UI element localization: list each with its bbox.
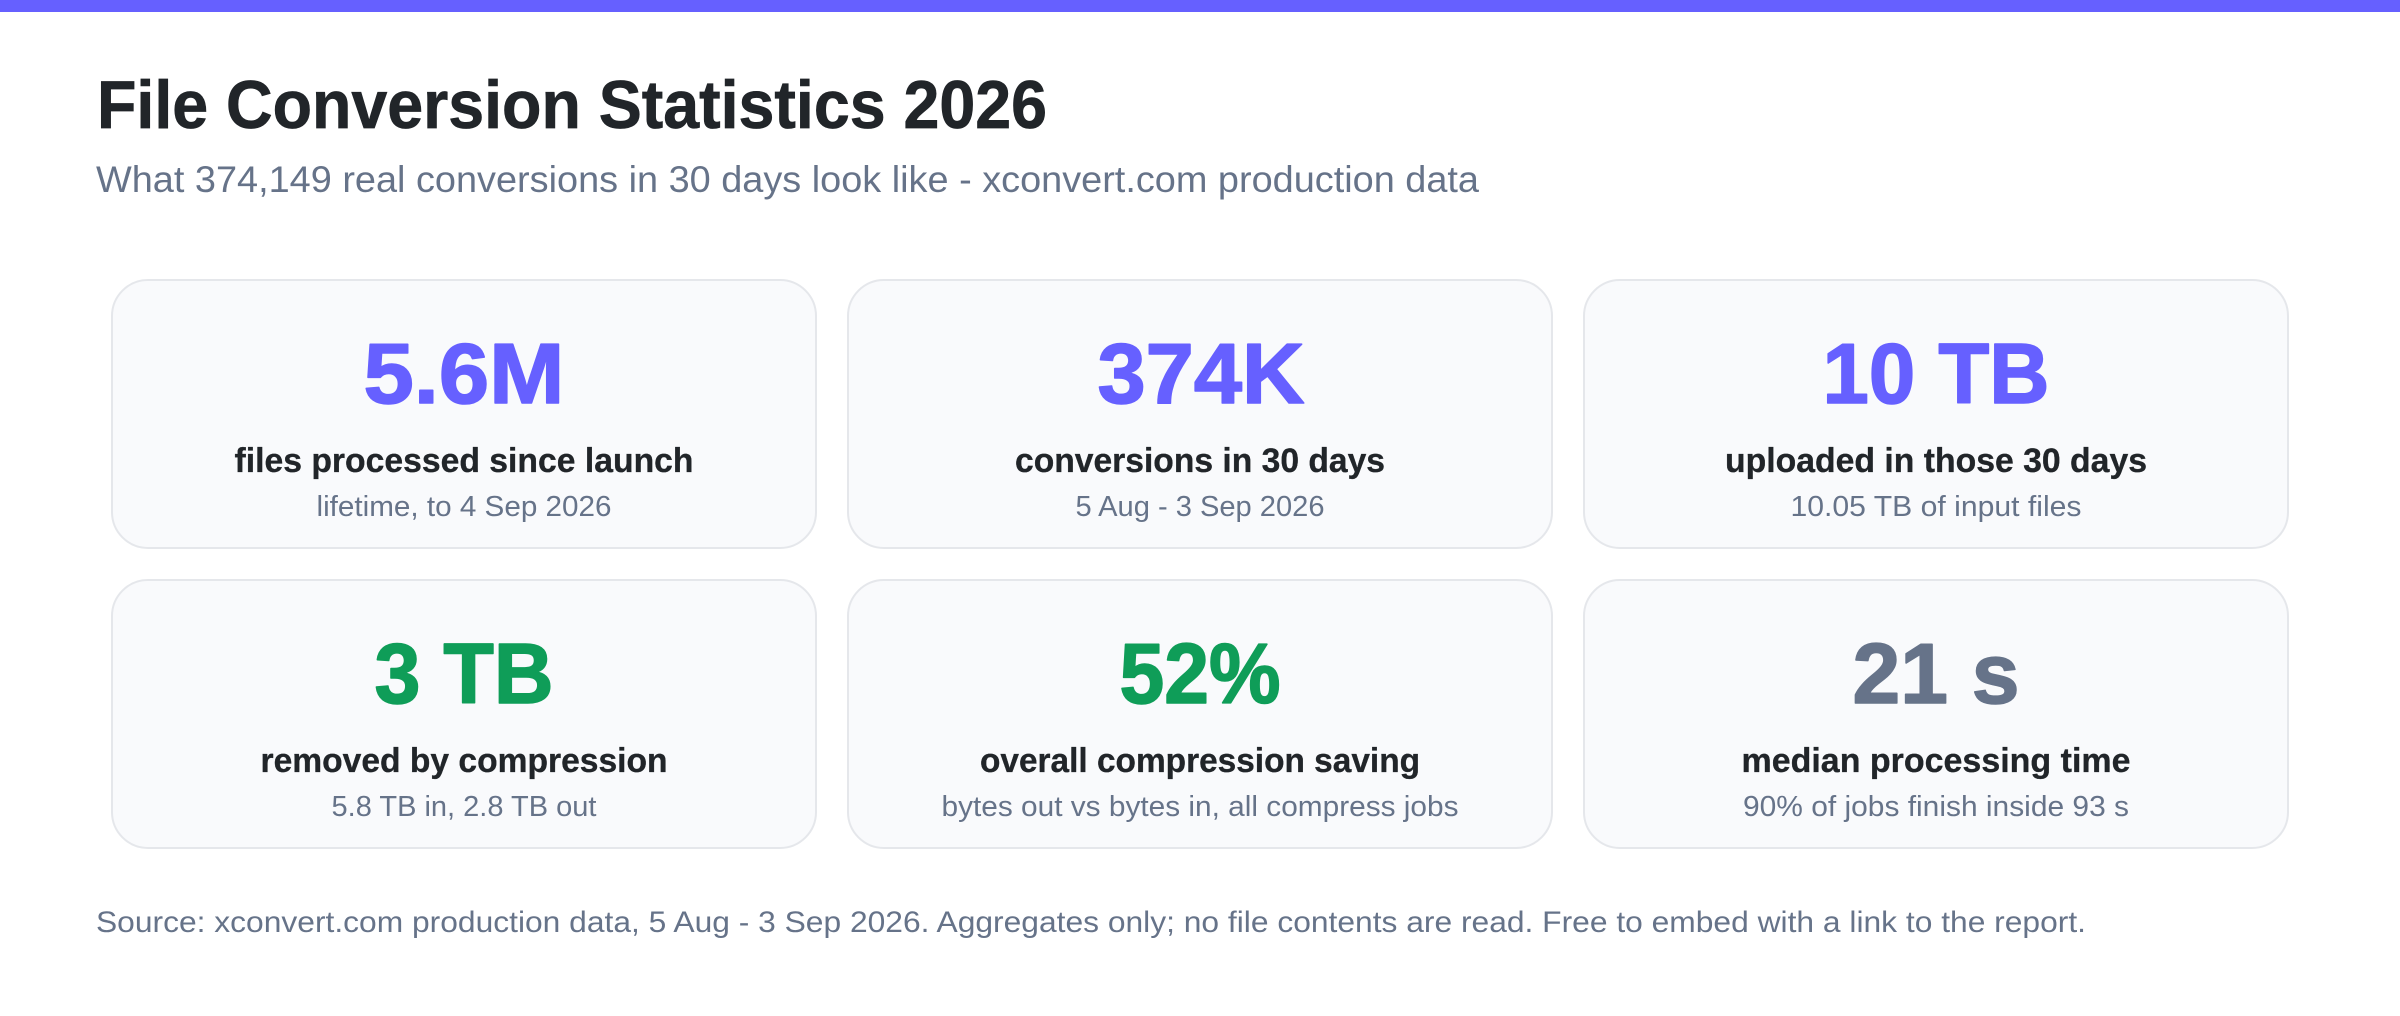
title: File Conversion Statistics 2026 bbox=[97, 67, 1047, 143]
top accent bar bbox=[0, 0, 2400, 12]
panel: processing time bbox=[1584, 580, 2288, 848]
note: input files: 10.05 TB of input files bbox=[1790, 491, 2082, 523]
label: median: median processing time bbox=[1742, 742, 2130, 780]
label: uploaded: uploaded in those 30 days bbox=[1725, 442, 2147, 480]
footer source note: Source: xconvert.com production data, 5 Aug - 3 Sep 2026. Aggregates only; no file contents are read. Free to embed with a link to the report. bbox=[96, 906, 2086, 939]
note: lifetime: lifetime, to 4 Sep 2026 bbox=[316, 491, 612, 523]
value: 52%: 52% bbox=[1120, 627, 1280, 722]
label: removed: removed by compression bbox=[260, 742, 668, 780]
value: 10 TB: 10 TB bbox=[1822, 327, 2050, 422]
value: 374K: 374K bbox=[1098, 327, 1304, 422]
note: bytes: bytes out vs bytes in, all compress jobs bbox=[942, 791, 1458, 823]
panel: compression saving bbox=[848, 580, 1552, 848]
note: 90%: 90% of jobs finish inside 93 s bbox=[1743, 791, 2129, 823]
label: saving: overall compression saving bbox=[980, 742, 1420, 780]
note: date range: 5 Aug - 3 Sep 2026 bbox=[1076, 491, 1324, 523]
panel: conversions bbox=[848, 280, 1552, 548]
panel: uploaded bbox=[1584, 280, 2288, 548]
label: files processed: files processed since launch bbox=[234, 442, 694, 480]
note: in and out: 5.8 TB in, 2.8 TB out bbox=[332, 791, 596, 823]
subtitle: What 374,149 real conversions in 30 days look like - xconvert.com production data bbox=[96, 159, 1479, 200]
value: 3 TB: 3 TB bbox=[374, 627, 554, 722]
panel: files processed bbox=[112, 280, 816, 548]
label: conversions: conversions in 30 days bbox=[1015, 442, 1385, 480]
value: 21 s: 21 s bbox=[1852, 627, 2020, 722]
value: 5.6M: 5.6M bbox=[364, 327, 564, 422]
panel: removed by compression bbox=[112, 580, 816, 848]
